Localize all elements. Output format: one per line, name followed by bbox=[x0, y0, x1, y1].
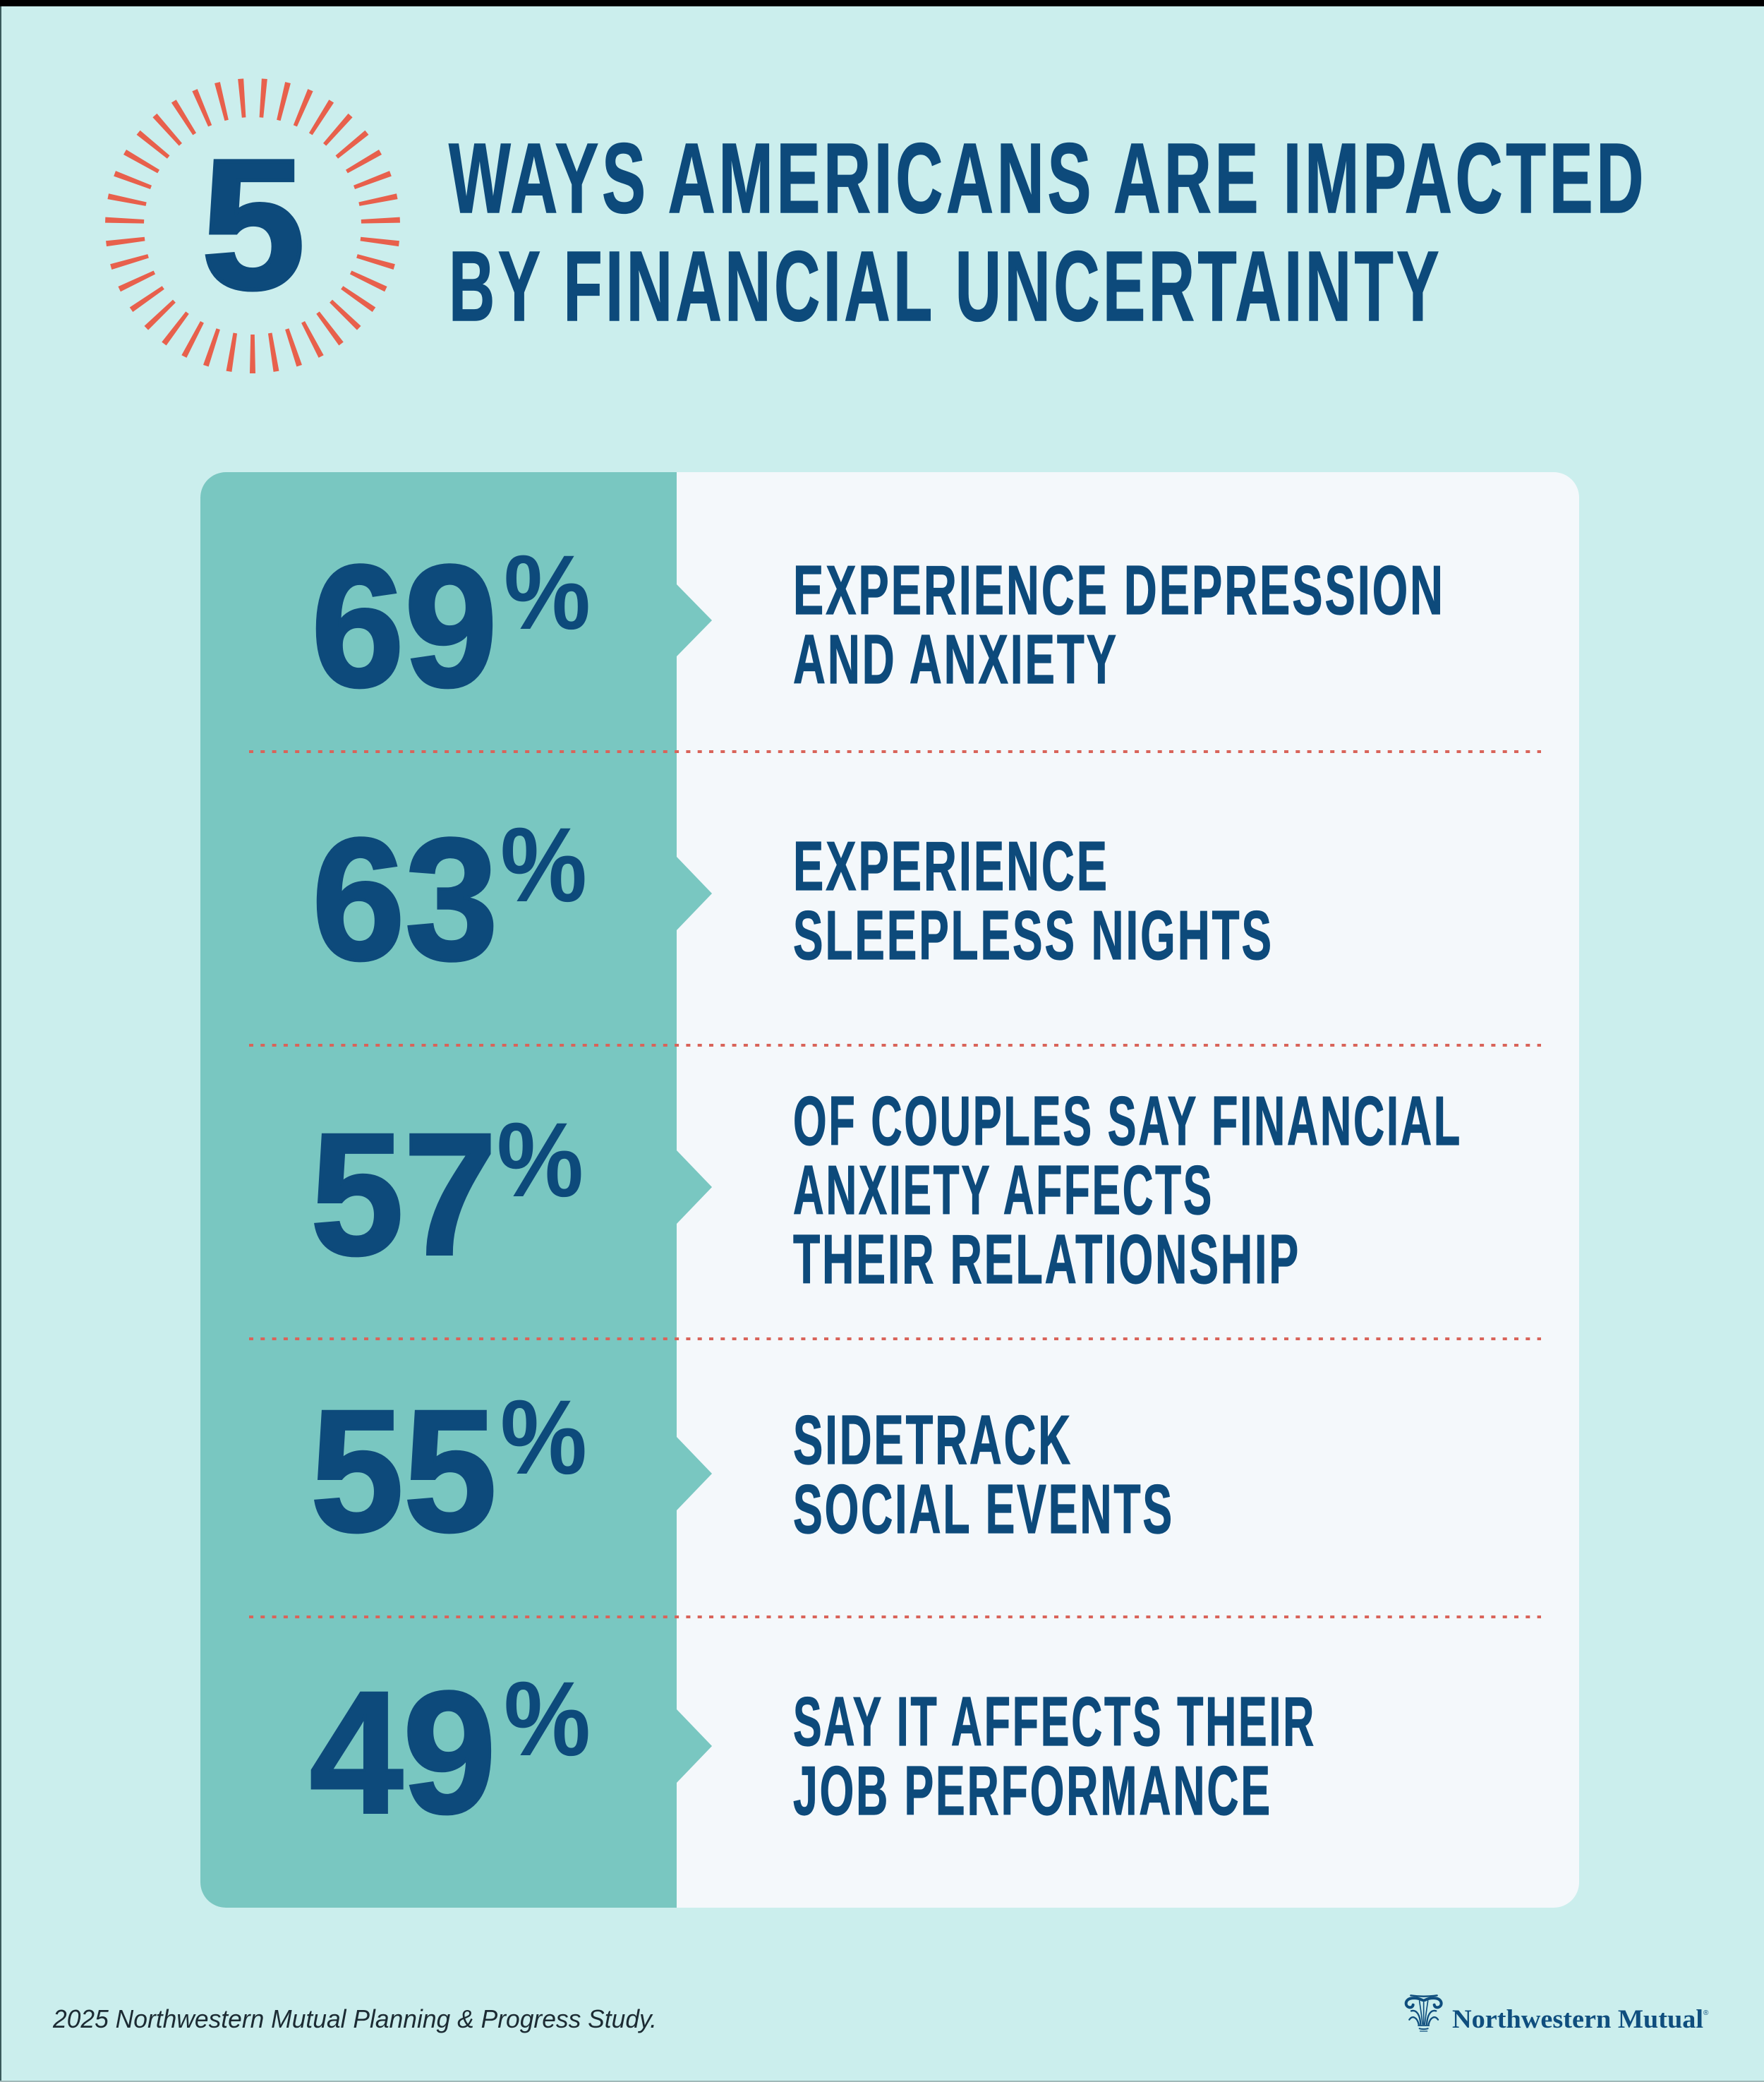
row: 63% bbox=[312, 802, 1274, 997]
row: 63%: 63 bbox=[312, 802, 498, 997]
row: 57%: % bbox=[497, 1100, 584, 1219]
row: 69% bbox=[311, 529, 1445, 723]
panel: statistics card bbox=[200, 472, 1579, 1908]
icon: sunburst with number 5: 5 bbox=[202, 122, 305, 327]
row: 63%: SLEEPLESS NIGHTS bbox=[793, 896, 1274, 974]
teal column with arrow pointers bbox=[200, 472, 712, 1908]
row: 55%: SOCIAL EVENTS bbox=[793, 1470, 1174, 1548]
title bbox=[449, 122, 1647, 342]
row: 55% bbox=[310, 1374, 1174, 1568]
row: 57%: ANXIETY AFFECTS bbox=[793, 1151, 1214, 1229]
icon: sunburst with number 5 bbox=[105, 78, 400, 373]
row: 49% bbox=[310, 1656, 1316, 1850]
source footnote: 2025 Northwestern Mutual Planning & Progress Study. bbox=[52, 2004, 657, 2033]
row: 69%: EXPERIENCE DEPRESSION bbox=[793, 551, 1445, 629]
icon: column capital bbox=[1406, 1995, 1442, 2031]
card background bbox=[200, 472, 1579, 1908]
dotted row dividers bbox=[249, 752, 1541, 1617]
row: 49%: 49 bbox=[310, 1656, 496, 1850]
row: 57% bbox=[310, 1082, 1462, 1298]
logo: Northwestern Mutual: ® bbox=[1703, 2009, 1709, 2017]
logo: Northwestern Mutual: Northwestern Mutual bbox=[1452, 2005, 1703, 2034]
row: 69%: 69 bbox=[311, 529, 497, 723]
row: 49%: % bbox=[504, 1659, 591, 1778]
row: 49%: SAY IT AFFECTS THEIR bbox=[793, 1683, 1316, 1760]
row: 69%: % bbox=[504, 533, 591, 651]
row: 63%: % bbox=[500, 805, 587, 924]
row: 57%: THEIR RELATIONSHIP bbox=[793, 1220, 1300, 1298]
row: 57%: 57 bbox=[310, 1097, 497, 1292]
row: 69%: AND ANXIETY bbox=[793, 620, 1118, 698]
row: 49%: JOB PERFORMANCE bbox=[793, 1752, 1272, 1829]
logo: Northwestern Mutual bbox=[1406, 1995, 1709, 2034]
row: 55%: % bbox=[500, 1378, 587, 1496]
row: 55%: SIDETRACK bbox=[793, 1401, 1073, 1479]
row: 55%: 55 bbox=[310, 1374, 497, 1568]
row: 63%: EXPERIENCE bbox=[793, 827, 1109, 905]
